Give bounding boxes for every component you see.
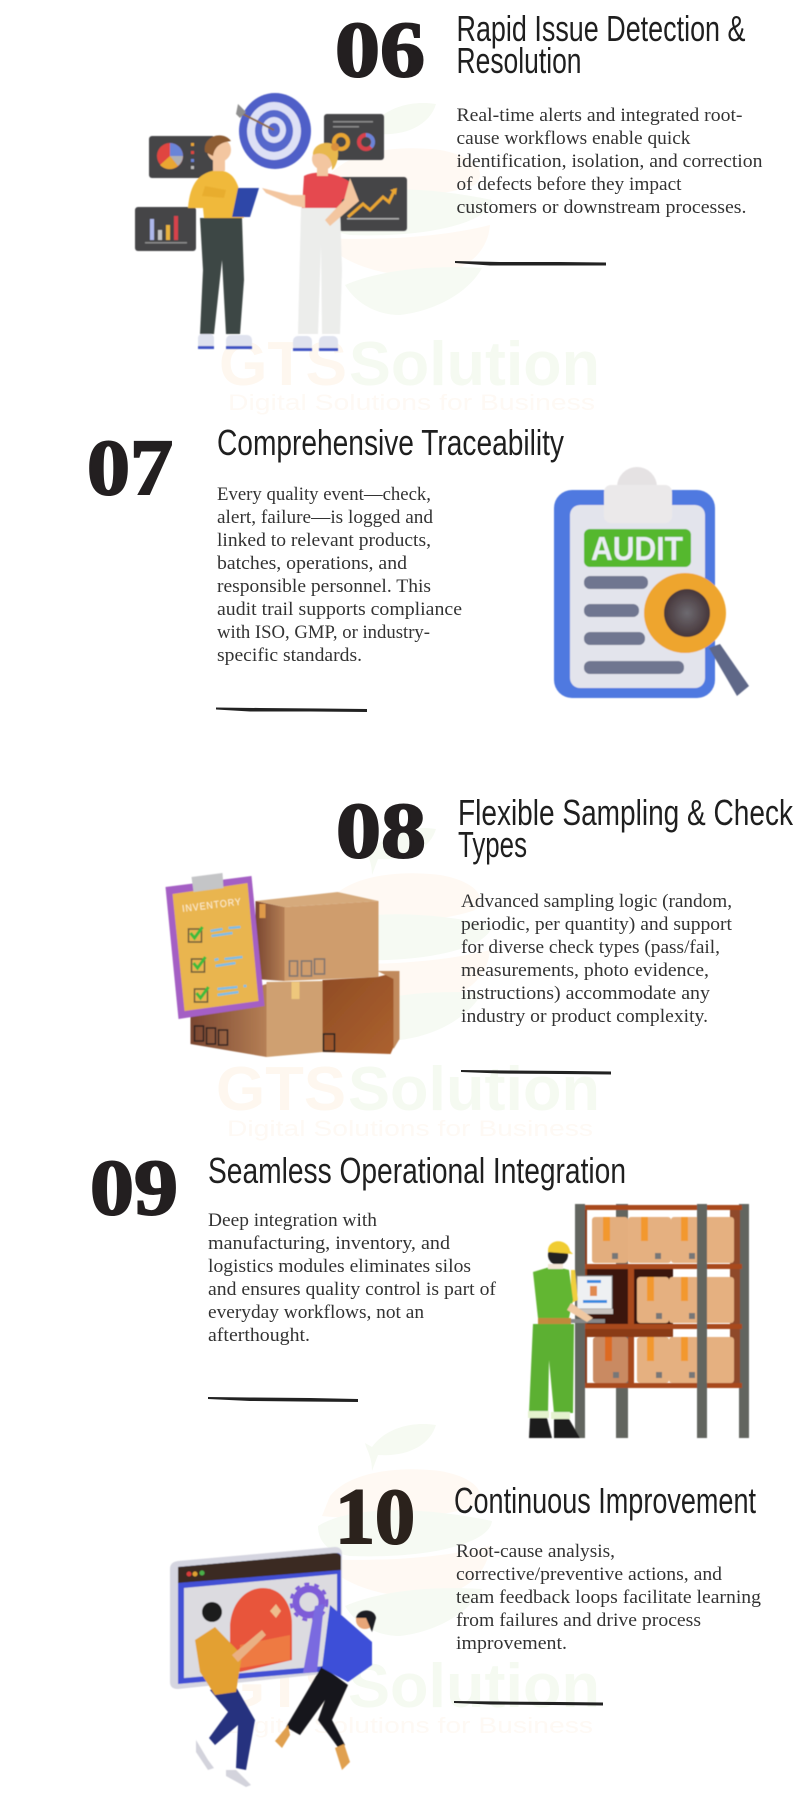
- backpack: [230, 1588, 292, 1672]
- heading 08: [458, 792, 794, 865]
- bottom left box: [190, 981, 322, 1057]
- inventory clipboard: [166, 873, 264, 1019]
- body text 06: Real-time alerts and integrated root-: [456, 105, 742, 126]
- illustration: audit clipboard: [554, 467, 749, 698]
- heading 07: Comprehensive Traceability: [217, 422, 564, 463]
- panel: section 08: [166, 788, 794, 1074]
- inventory clipboard: INVENTORY: [182, 897, 242, 915]
- number 09: 09: [90, 1145, 178, 1232]
- divider stroke 10: [454, 1701, 603, 1706]
- number 10: 10: [335, 1474, 415, 1561]
- app window: [170, 1547, 342, 1689]
- ruler: [303, 1604, 324, 1673]
- bar chart panel: [135, 207, 196, 251]
- watermark 2: Digital Solutions for Business: [227, 1116, 593, 1141]
- worker figure: [528, 1241, 593, 1438]
- body text 07: specific standards.: [217, 645, 362, 666]
- body text 06: identification, isolation, and correction: [456, 151, 763, 172]
- watermark 1: [219, 103, 600, 415]
- top box: [256, 892, 378, 981]
- watermark 2: [216, 828, 600, 1141]
- pie chart panel: [149, 136, 215, 178]
- heading 06: [456, 8, 746, 81]
- body text 06: customers or downstream processes.: [456, 197, 746, 218]
- heading 08: Types: [458, 824, 527, 865]
- body text 06: cause workflows enable quick: [456, 128, 691, 149]
- panel: section 06: [135, 7, 763, 351]
- body text 07: responsible personnel. This: [217, 576, 431, 597]
- body text 07: Every quality event—check,: [217, 484, 431, 505]
- watermark 3: Solution: [348, 1652, 600, 1721]
- target with arrow: [236, 93, 311, 169]
- watermark 1: Solution: [349, 330, 600, 399]
- bottom right box: [322, 971, 400, 1054]
- divider stroke 06: [455, 261, 606, 266]
- number 07: 07: [87, 425, 173, 512]
- watermark 1: Digital Solutions for Business: [228, 390, 595, 415]
- illustration: inventory clipboard and boxes: [166, 873, 400, 1057]
- panel: section 07: [87, 422, 749, 712]
- body text 08: Advanced sampling logic (random,: [461, 891, 732, 912]
- body text 08: industry or product complexity.: [461, 1006, 708, 1027]
- shelving: [582, 1204, 749, 1438]
- left person: [195, 1602, 266, 1787]
- gear: [291, 1584, 327, 1620]
- watermark 3: Digital Solutions for Business: [227, 1713, 593, 1738]
- body text 09: and ensures quality control is part of: [208, 1279, 497, 1300]
- body text 09: everyday workflows, not an: [208, 1302, 425, 1323]
- watermark 2: GTS: [216, 1055, 346, 1124]
- body text 09: [208, 1210, 497, 1346]
- body text 06: of defects before they impact: [456, 174, 682, 195]
- body text 10: improvement.: [456, 1633, 567, 1654]
- heading 09: Seamless Operational Integration: [208, 1150, 626, 1191]
- body text 07: alert, failure—is logged and: [217, 507, 433, 528]
- body text 08: periodic, per quantity) and support: [461, 914, 733, 935]
- body text 10: corrective/preventive actions, and: [456, 1564, 723, 1585]
- body text 07: batches, operations, and: [217, 553, 408, 574]
- donut chart panel: [324, 114, 384, 160]
- woman figure: [262, 143, 359, 351]
- illustration: team with target and charts: [135, 93, 407, 351]
- body text 06: [456, 105, 763, 218]
- divider stroke 09: [208, 1397, 358, 1402]
- body text 07: with ISO, GMP, or industry-: [217, 622, 430, 643]
- watermark 3: [216, 1424, 600, 1738]
- computer monitor: [569, 1276, 613, 1323]
- body text 07: [217, 484, 462, 666]
- body text 09: afterthought.: [208, 1325, 310, 1346]
- boxes: [592, 1217, 734, 1383]
- divider stroke 07: [216, 708, 367, 712]
- body text 09: manufacturing, inventory, and: [208, 1233, 451, 1254]
- panel: section 09: [90, 1145, 749, 1438]
- body text 10: from failures and drive process: [456, 1610, 701, 1631]
- panel: section 10: [170, 1474, 762, 1787]
- watermark 1: GTS: [219, 330, 347, 399]
- right person: [275, 1605, 376, 1770]
- body text 10: [456, 1541, 762, 1654]
- body text 10: Root-cause analysis,: [456, 1541, 615, 1562]
- body text 08: for diverse check types (pass/fail,: [461, 937, 720, 958]
- body text 09: Deep integration with: [208, 1210, 377, 1231]
- line chart panel: [338, 177, 407, 231]
- number 06: 06: [335, 7, 425, 94]
- heading 06: Resolution: [456, 40, 582, 81]
- body text 07: linked to relevant products,: [217, 530, 431, 551]
- man figure: [188, 135, 259, 349]
- audit label: AUDIT: [591, 530, 683, 567]
- watermark 2: Solution: [348, 1055, 600, 1124]
- body text 09: logistics modules eliminates silos: [208, 1256, 471, 1277]
- number 08: 08: [336, 788, 426, 875]
- divider stroke 08: [461, 1070, 611, 1074]
- illustration: worker at warehouse shelves: [528, 1204, 749, 1438]
- body text 07: audit trail supports compliance: [217, 599, 462, 620]
- body text 08: instructions) accommodate any: [461, 983, 711, 1004]
- body text 10: team feedback loops facilitate learning: [456, 1587, 762, 1608]
- body text 08: measurements, photo evidence,: [461, 960, 709, 981]
- watermark 3: GTS: [216, 1652, 346, 1721]
- illustration: two people fixing app window: [170, 1547, 376, 1787]
- magnifier: [644, 573, 749, 696]
- body text 08: [461, 891, 733, 1027]
